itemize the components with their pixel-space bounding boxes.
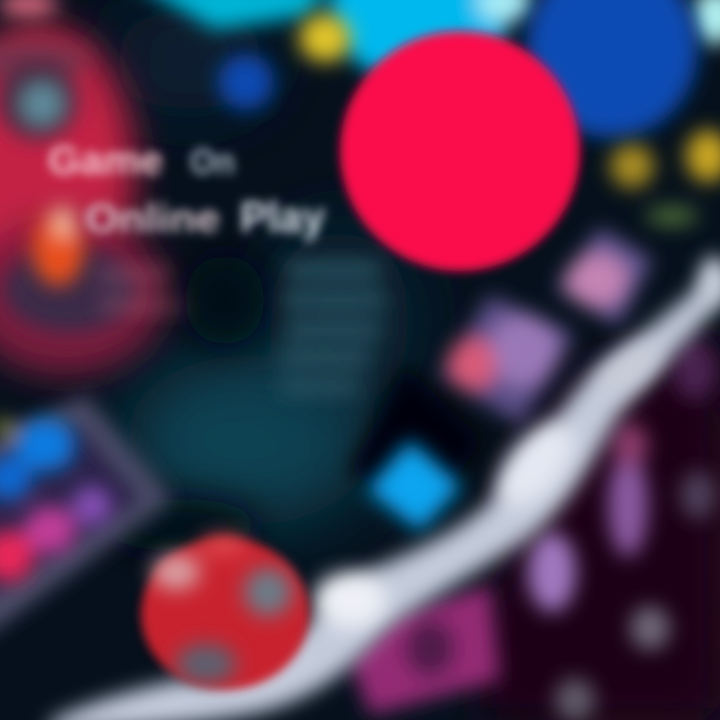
title text: Online (85, 197, 220, 241)
title text: On (190, 141, 235, 182)
top cyan shapes (130, 0, 720, 84)
red ball (141, 535, 309, 690)
title text: Game (48, 139, 163, 183)
title text: Play (240, 193, 325, 242)
right bottom dark panel (480, 320, 720, 720)
blue circle top right (526, 0, 698, 138)
title text (48, 139, 325, 242)
orange blob (32, 206, 84, 286)
tablet bottom left (0, 395, 172, 640)
left text block (100, 270, 190, 310)
large pink-red circle (340, 31, 580, 271)
dark shadow (100, 255, 265, 551)
dark diamond (350, 365, 482, 530)
body text block (280, 262, 385, 394)
blue app square (366, 440, 462, 532)
yellow blobs (299, 14, 720, 226)
purple app squares (440, 228, 652, 425)
purple app blobs (528, 340, 717, 720)
pink square bottom (350, 585, 500, 715)
small blue blob (218, 54, 274, 110)
white swoosh (50, 265, 720, 720)
left target graphic (0, 0, 165, 375)
